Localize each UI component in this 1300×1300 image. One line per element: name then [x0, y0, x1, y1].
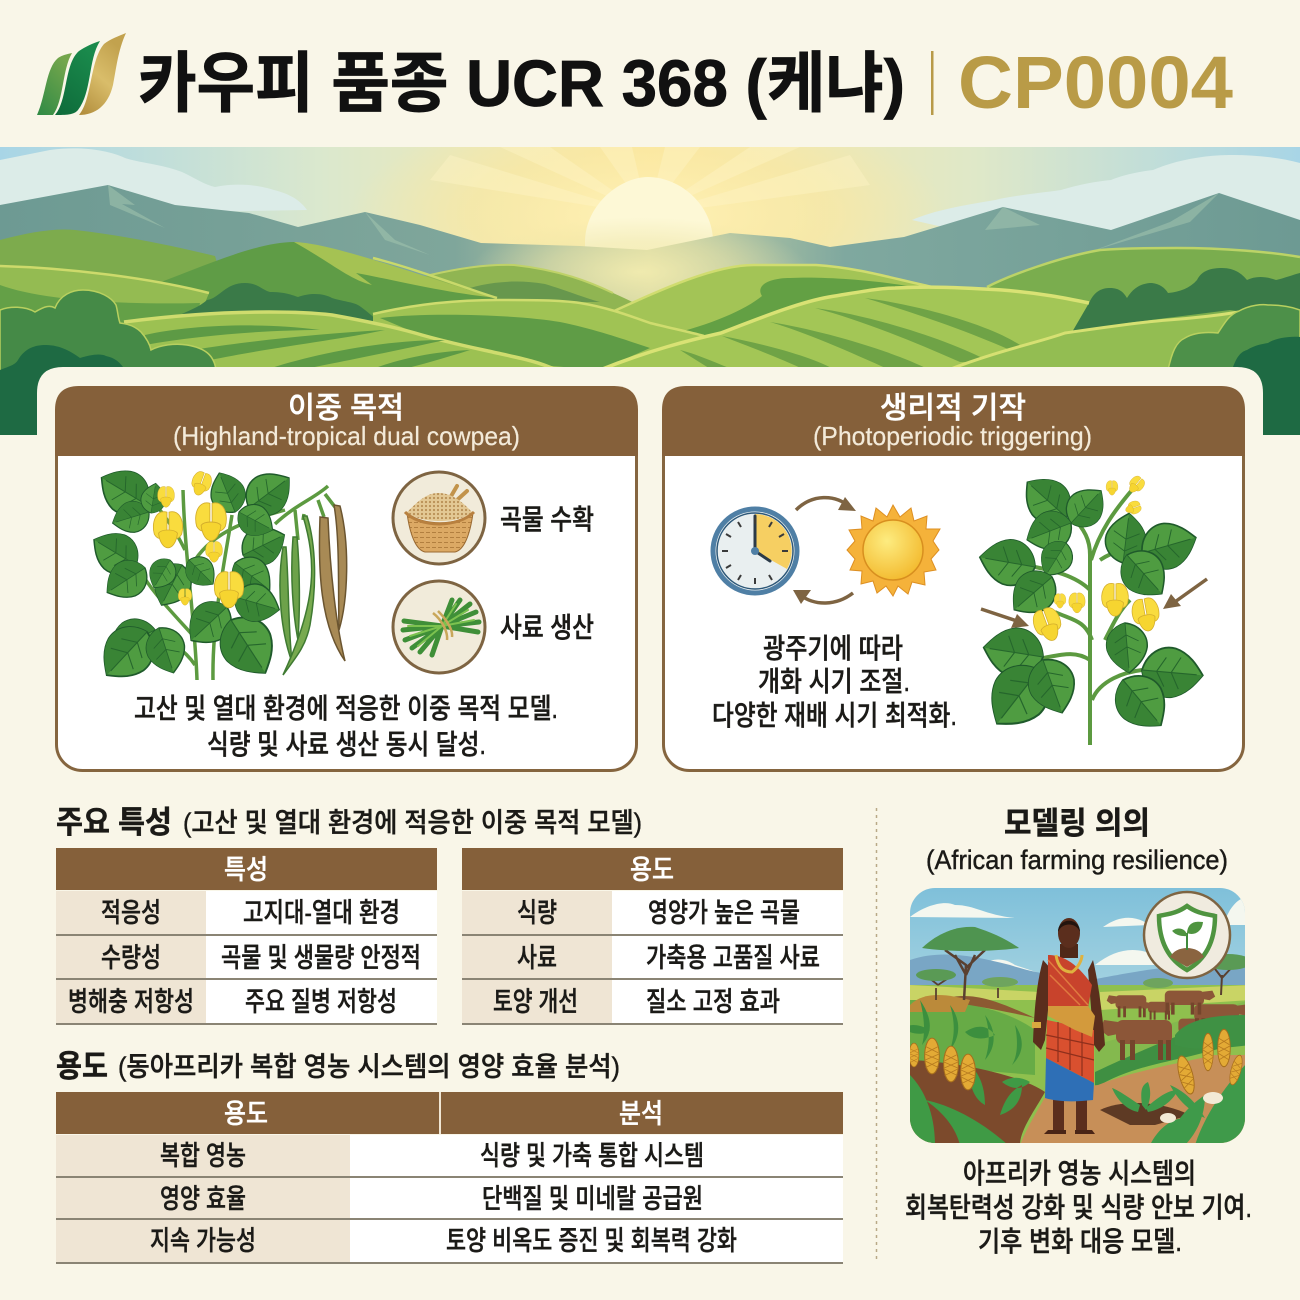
rolling hills — [0, 230, 1300, 335]
table: uses — [462, 848, 843, 1025]
description: photoperiod — [712, 633, 957, 731]
table: characteristics: 곡물 및 생물량 안정적 — [221, 943, 421, 973]
table: uses: 질소 고정 효과 — [646, 987, 780, 1017]
section heading: key characteristics — [56, 805, 642, 840]
table: analysis: 용도 — [224, 1099, 268, 1129]
left and right bushes — [0, 290, 1300, 440]
distant hills — [910, 954, 1245, 985]
crops right — [1100, 1029, 1250, 1145]
content sheet overlapping banner — [37, 367, 1263, 1300]
table: characteristics: 수량성 — [101, 943, 161, 973]
panel header: dual purpose — [55, 386, 638, 456]
icon: forage bundle — [393, 581, 485, 673]
table: analysis: 복합 영농 — [160, 1141, 246, 1171]
icon: clock — [713, 509, 797, 593]
illustration: cowpea plant with pods — [84, 459, 347, 691]
clouds — [0, 148, 1300, 230]
panel header: physiological mechanism: (Photoperiodic triggering) — [813, 421, 1092, 451]
soil left — [910, 1060, 1045, 1145]
banner: sunrise over green hills — [0, 147, 1300, 435]
table: characteristics: 고지대-열대 환경 — [243, 898, 400, 928]
icon: sun — [847, 505, 940, 596]
heading: modelling significance: 모델링 의의 — [1004, 806, 1150, 841]
table: characteristics: 주요 질병 저항성 — [245, 987, 397, 1017]
table: analysis: 분석 — [619, 1099, 663, 1129]
arrow: pointing at right flowers — [1163, 579, 1207, 609]
table: characteristics: 병해충 저항성 — [68, 987, 194, 1017]
table: uses: 사료 — [517, 943, 557, 973]
table: analysis: 토양 비옥도 증진 및 회복력 강화 — [446, 1226, 737, 1256]
panel header: dual purpose: (Highland-tropical dual cowpea) — [173, 421, 520, 451]
table: analysis: 영양 효율 — [160, 1184, 246, 1214]
table: uses: 용도 — [630, 855, 674, 885]
terraced foreground fields — [124, 287, 1300, 370]
panel header: dual purpose: 이중 목적 — [288, 392, 404, 425]
title: 카우피 품종 UCR 368 (케냐) — [138, 46, 905, 120]
table: characteristics — [56, 848, 437, 1025]
section heading: key characteristics: 주요 특성 — [56, 805, 172, 840]
tree clusters — [182, 268, 1300, 330]
table: uses: 영양가 높은 곡물 — [648, 898, 800, 928]
distant mountains — [0, 185, 1300, 302]
illustration: flowering plant — [975, 467, 1205, 745]
heading: modelling significance — [926, 806, 1228, 875]
label: forage production: 사료 생산 — [500, 612, 594, 643]
table: analysis: 지속 가능성 — [150, 1226, 256, 1256]
corn and crops left — [905, 1000, 1030, 1145]
arrow: pointing at left flowers — [981, 609, 1029, 628]
icon: grain basket — [393, 472, 485, 564]
description: photoperiod: 다양한 재배 시기 최적화. — [712, 700, 957, 731]
panel: physiological mechanism — [662, 386, 1245, 770]
green bushes — [1175, 1015, 1245, 1048]
section heading: key characteristics: (고산 및 열대 환경에 적응한 이중 목적 모델) — [183, 808, 642, 838]
sun glow and rays — [393, 147, 896, 250]
title separator — [931, 51, 934, 115]
table: uses: 토양 개선 — [493, 987, 578, 1017]
product code: CP0004 — [958, 41, 1233, 124]
arrow: clock to sun — [796, 497, 856, 511]
farmer — [1032, 918, 1105, 1134]
section heading: uses: (동아프리카 복합 영농 시스템의 영양 효율 분석) — [118, 1052, 620, 1082]
table: analysis: 단백질 및 미네랄 공급원 — [482, 1184, 703, 1214]
heading: modelling significance: (African farming resilience) — [926, 845, 1228, 875]
panel header: physiological mechanism: 생리적 기작 — [880, 392, 1026, 425]
header: logo and title — [37, 33, 1233, 124]
section heading: uses: 용도 — [56, 1049, 108, 1084]
illustration: African farmer scene — [905, 888, 1252, 1145]
fields — [910, 985, 1250, 1145]
description: African farming resilience: 기후 변화 대응 모델. — [978, 1226, 1182, 1257]
panel: dual purpose — [55, 386, 638, 770]
table: characteristics: 적응성 — [101, 898, 161, 928]
dirt path — [1020, 1055, 1250, 1145]
table: analysis — [56, 1092, 843, 1264]
arrow: sun to clock — [793, 590, 853, 604]
table: uses: 식량 — [517, 898, 557, 928]
description: African farming resilience — [905, 1158, 1252, 1257]
table: analysis: 식량 및 가축 통합 시스템 — [480, 1141, 704, 1171]
description: dual purpose: 고산 및 열대 환경에 적응한 이중 목적 모델. — [134, 693, 558, 724]
label: grain harvest: 곡물 수확 — [500, 504, 594, 535]
description: African farming resilience: 아프리카 영농 시스템의 — [963, 1158, 1196, 1189]
acacia trees — [916, 927, 1252, 1000]
cattle — [1100, 991, 1252, 1060]
description: photoperiod: 개화 시기 조절. — [758, 666, 910, 697]
description: dual purpose: 식량 및 사료 생산 동시 달성. — [207, 729, 486, 760]
table: characteristics: 특성 — [224, 855, 268, 885]
icon: resilience shield badge — [1144, 892, 1230, 978]
table: uses: 가축용 고품질 사료 — [646, 943, 820, 973]
description: photoperiod: 광주기에 따라 — [763, 633, 903, 664]
logo — [37, 33, 126, 115]
description: dual purpose — [134, 693, 558, 760]
clouds — [910, 898, 1250, 975]
panel header: physiological mechanism — [662, 386, 1245, 456]
